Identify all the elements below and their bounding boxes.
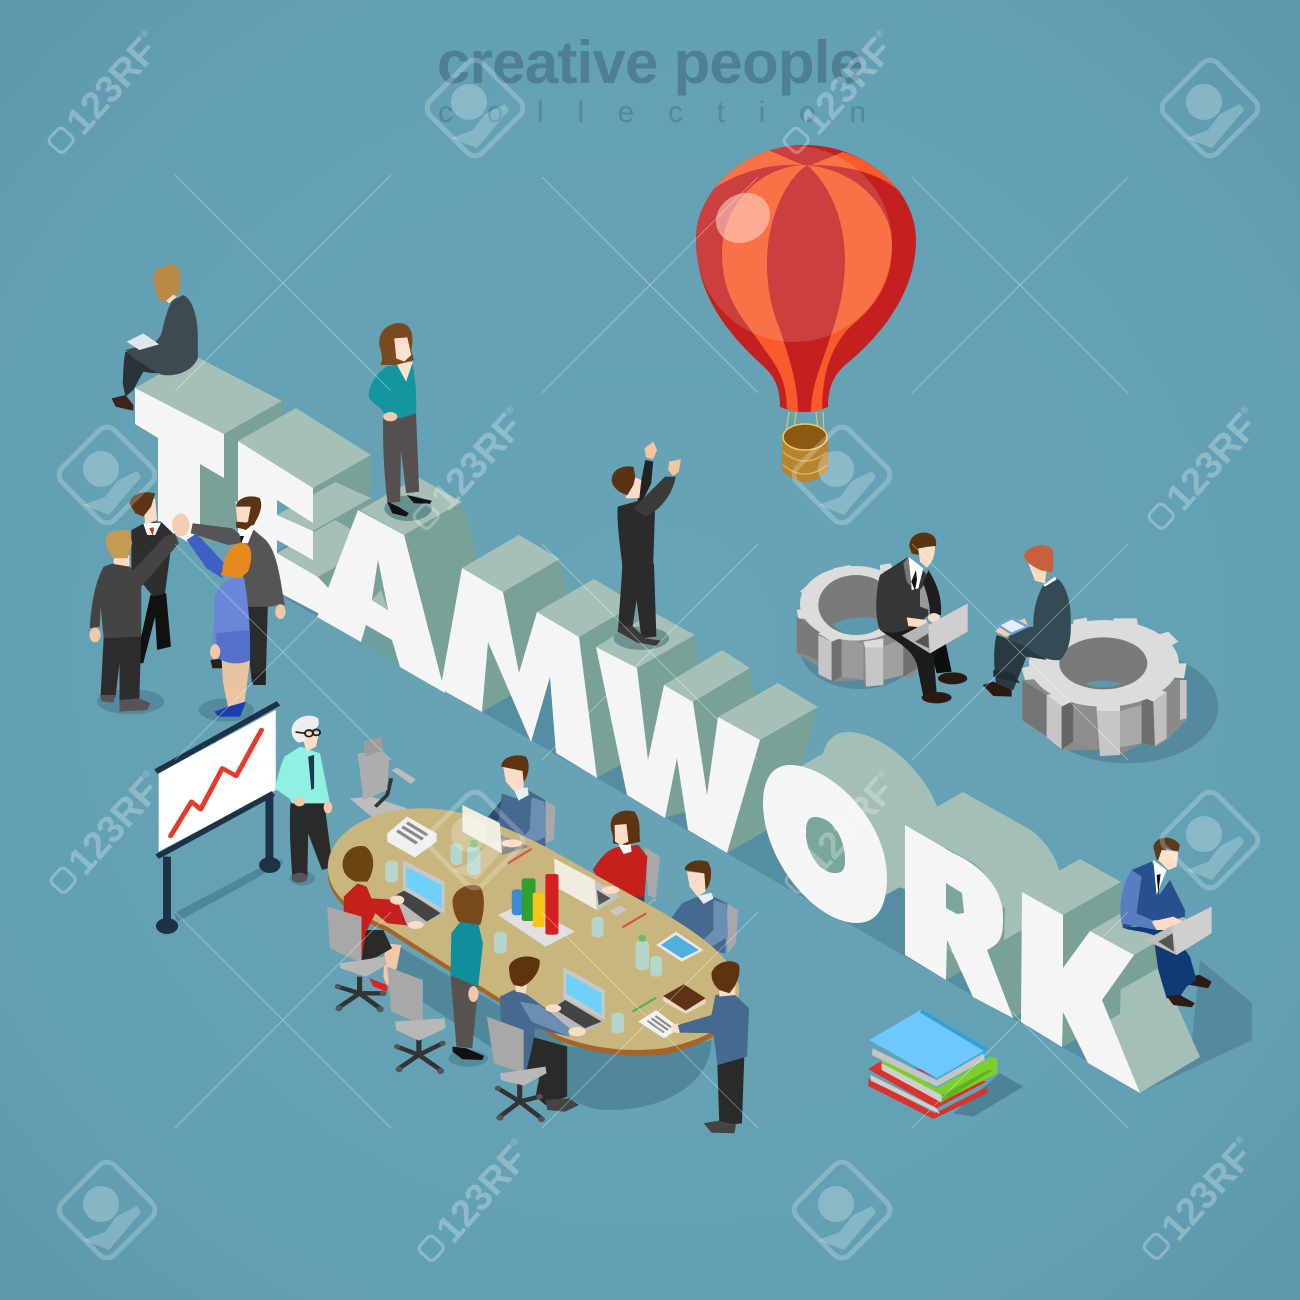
stack of books: [868, 1009, 1023, 1119]
flip chart whiteboard with presenter: [156, 703, 333, 934]
business group high five beside letter T: [89, 492, 286, 722]
blue-suit man figure: [1120, 838, 1212, 1007]
watermark 6: ®: [876, 768, 889, 781]
watermark 5: ®: [141, 768, 154, 781]
watermark 6: [777, 764, 908, 903]
red line chart: [171, 730, 262, 836]
title: creative people collection: [437, 29, 866, 129]
paper stack: [387, 817, 437, 857]
balloon basket: [782, 424, 828, 482]
watermark 3: [405, 400, 536, 539]
foot shadow: [614, 627, 669, 650]
book shadow: [953, 1073, 1023, 1117]
empty office chair: [350, 737, 416, 820]
left gear: [797, 563, 917, 687]
watermark 1: ®: [139, 28, 152, 41]
man with raised arms on letter M-W: [612, 442, 681, 650]
whiteboard panel: [159, 710, 276, 852]
businessman with tablet on right gear: [983, 545, 1071, 697]
whiteboard shadow: [174, 859, 282, 922]
gears with two seated businessmen: [797, 533, 1218, 763]
office chair middle: [387, 967, 446, 1074]
man seated on letter T with tablet: [112, 265, 198, 411]
standing woman figure: [369, 323, 432, 517]
chair behind top man: [545, 800, 555, 843]
laptop of red-top woman: [554, 858, 621, 911]
table top: [328, 808, 739, 1050]
letter shadow band: [240, 531, 1212, 1092]
bearded man: [191, 496, 286, 685]
pencils, device, tablet, notebook, paper: [508, 849, 706, 1038]
watermark 1: 123RF: [58, 30, 166, 143]
woman in red at far side: [593, 811, 647, 907]
businessman with laptop on left gear: [876, 533, 968, 703]
letter M: [430, 535, 654, 778]
watermark 4: [1140, 400, 1271, 539]
blue-suit woman: [187, 533, 254, 722]
watermark 7: 123RF: [428, 1138, 536, 1251]
businessman in blue suit sitting on letter K with laptop: [1120, 838, 1212, 1007]
watermark 8: ®: [1234, 1134, 1247, 1147]
balloon envelope: [690, 140, 920, 420]
title line: creative people: [437, 29, 863, 96]
open laptop left: [381, 860, 445, 930]
woman in red with back to viewer: [343, 846, 424, 992]
watermark 2: ®: [874, 28, 887, 41]
blue book: [869, 1009, 988, 1088]
hot air balloon: [690, 140, 920, 482]
watermark 1: [40, 24, 171, 163]
man in vest at right side: [670, 860, 728, 953]
watermark 8: [1135, 1130, 1266, 1269]
letter W: [596, 612, 818, 853]
woman standing on letter A: [369, 323, 432, 521]
watermark 3: 123RF: [423, 406, 531, 519]
blond man from behind: [89, 530, 179, 714]
office chair front: [487, 1017, 547, 1122]
laptop of far man: [462, 805, 530, 855]
red book: [868, 1062, 987, 1119]
right gear: [1022, 618, 1187, 756]
chair behind red-top woman: [644, 847, 660, 907]
letter O: [763, 732, 945, 923]
gray-haired presenter: [275, 716, 333, 886]
man with red tie: [129, 492, 173, 663]
watermark 2: 123RF: [793, 30, 901, 143]
watermark 3: ®: [504, 404, 517, 417]
table shadow: [395, 947, 711, 1110]
watermark 2: [775, 24, 906, 163]
chair behind right man: [727, 903, 738, 953]
letter T: [135, 355, 282, 549]
watermark 4: ®: [1239, 404, 1252, 417]
green book: [882, 1057, 997, 1103]
seated man figure: [112, 265, 198, 411]
letter A: [317, 477, 503, 693]
whiteboard stand: [156, 795, 280, 934]
open laptop front: [541, 967, 605, 1035]
letter K: [1021, 859, 1252, 1093]
standing man at table end: [678, 961, 749, 1133]
standing woman in teal: [449, 885, 488, 1067]
table edge: [328, 813, 739, 1056]
man in vest at far side: [488, 755, 546, 847]
glasses and bottles: [385, 840, 662, 1033]
joined hands: [172, 514, 189, 536]
letter E: [238, 408, 390, 622]
thin watermark cross lines: [175, 175, 1128, 1128]
subtitle line: collection: [438, 96, 866, 129]
watermark 7: [410, 1132, 541, 1271]
letter R: [905, 792, 1071, 1018]
bar chart model on table: [498, 874, 575, 947]
word TEAMWORK in 3D block letters: [135, 355, 1252, 1093]
man figure: [612, 442, 681, 646]
foot shadow: [384, 496, 432, 521]
watermark 5: [42, 764, 173, 903]
watermark 8: 123RF: [1153, 1136, 1261, 1249]
watermark 6: 123RF: [795, 770, 903, 883]
gear shadows: [800, 608, 1218, 763]
seated man front: [500, 957, 586, 1112]
office chair left: [327, 907, 386, 1012]
watermark 4: 123RF: [1158, 406, 1266, 519]
balloon ropes: [786, 412, 824, 432]
whiteboard frame bars: [156, 703, 279, 857]
conference table scene with team: [327, 737, 749, 1133]
watermark 5: 123RF: [60, 770, 168, 883]
watermark 7: ®: [509, 1136, 522, 1149]
